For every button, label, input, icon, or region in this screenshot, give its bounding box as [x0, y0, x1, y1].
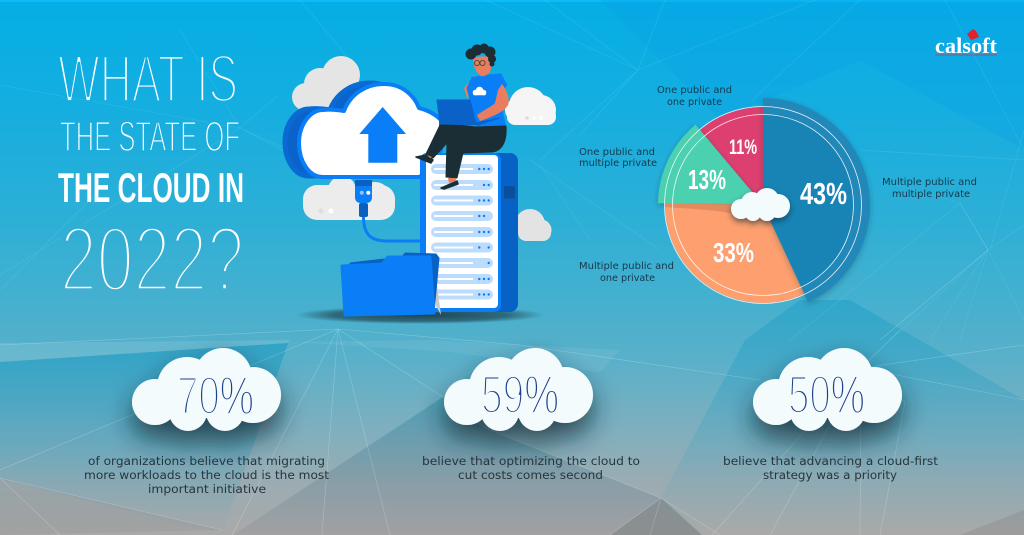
figure: 50%	[788, 365, 865, 425]
title line: THE CLOUD IN: THE CLOUD IN	[58, 164, 244, 211]
description: important initiative	[148, 483, 266, 496]
hair	[466, 44, 496, 66]
center cloud	[731, 188, 790, 221]
title	[58, 41, 244, 311]
shoes	[416, 155, 458, 189]
description: more workloads to the cloud is the most	[84, 469, 330, 482]
folder	[342, 253, 441, 315]
label: one public one private: One public and	[657, 85, 732, 96]
label: multiple public one private: Multiple public and	[579, 261, 674, 272]
description: of organizations believe that migrating	[88, 455, 325, 468]
title line: WHAT IS: WHAT IS	[58, 41, 238, 117]
description: strategy was a priority	[763, 469, 897, 482]
label: one public multiple private: One public and	[579, 147, 655, 158]
label: one public one private: one private	[667, 97, 722, 108]
description: cut costs comes second	[458, 469, 603, 482]
value: 43%: 43%	[800, 176, 847, 211]
label: multiple public multiple private: multiple private	[892, 189, 970, 200]
laptop	[437, 100, 499, 125]
title line: 2022?: 2022?	[60, 207, 244, 311]
description: believe that optimizing the cloud to	[422, 455, 640, 468]
label: multiple public multiple private	[882, 177, 977, 200]
description	[723, 455, 939, 482]
shirt cloud	[473, 87, 486, 95]
server rack	[420, 153, 518, 312]
stat: 70%	[84, 348, 330, 496]
rings	[664, 106, 862, 304]
pants	[426, 123, 506, 178]
illustration: cloud upload and server	[285, 44, 556, 324]
description	[84, 455, 330, 496]
glasses	[474, 60, 485, 66]
slice: 13%	[658, 125, 763, 205]
slice: 43%	[763, 98, 870, 302]
label: one public multiple private: multiple private	[579, 158, 657, 169]
skin ankles	[427, 155, 456, 183]
slice: 11%	[700, 107, 763, 205]
label: one public multiple private	[579, 147, 657, 169]
figure: 70%	[177, 366, 254, 426]
person with laptop	[416, 44, 509, 189]
cloud badge	[444, 348, 593, 431]
label: multiple public one private: one private	[600, 273, 655, 284]
logo: calsoft: calsoft	[935, 33, 998, 58]
description	[422, 455, 640, 482]
shadow under green on orange	[665, 204, 752, 218]
figure: 59%	[481, 365, 559, 425]
cloud badge	[132, 348, 281, 431]
value: 33%: 33%	[713, 237, 754, 268]
usb cable	[355, 180, 424, 241]
label: one public one private	[657, 85, 732, 108]
arm front	[477, 84, 509, 121]
pie chart	[579, 85, 977, 304]
stat: 59%	[422, 348, 640, 482]
face	[473, 56, 491, 76]
stat: 50%	[723, 348, 939, 482]
arm back and neck	[464, 75, 475, 98]
floor shadow	[295, 306, 545, 324]
upload cloud	[285, 83, 441, 177]
value: 13%: 13%	[688, 164, 726, 195]
title line: THE STATE OF: THE STATE OF	[60, 113, 240, 161]
slice: 33%	[665, 203, 804, 303]
label: multiple public one private	[579, 261, 674, 284]
background clouds	[292, 56, 556, 241]
value: 11%: 11%	[729, 136, 757, 159]
shirt	[466, 73, 507, 127]
label: multiple public multiple private: Multiple public and	[882, 177, 977, 188]
icon: upload arrow	[359, 107, 406, 163]
cloud badge	[753, 348, 902, 431]
description: believe that advancing a cloud-first	[723, 455, 939, 468]
